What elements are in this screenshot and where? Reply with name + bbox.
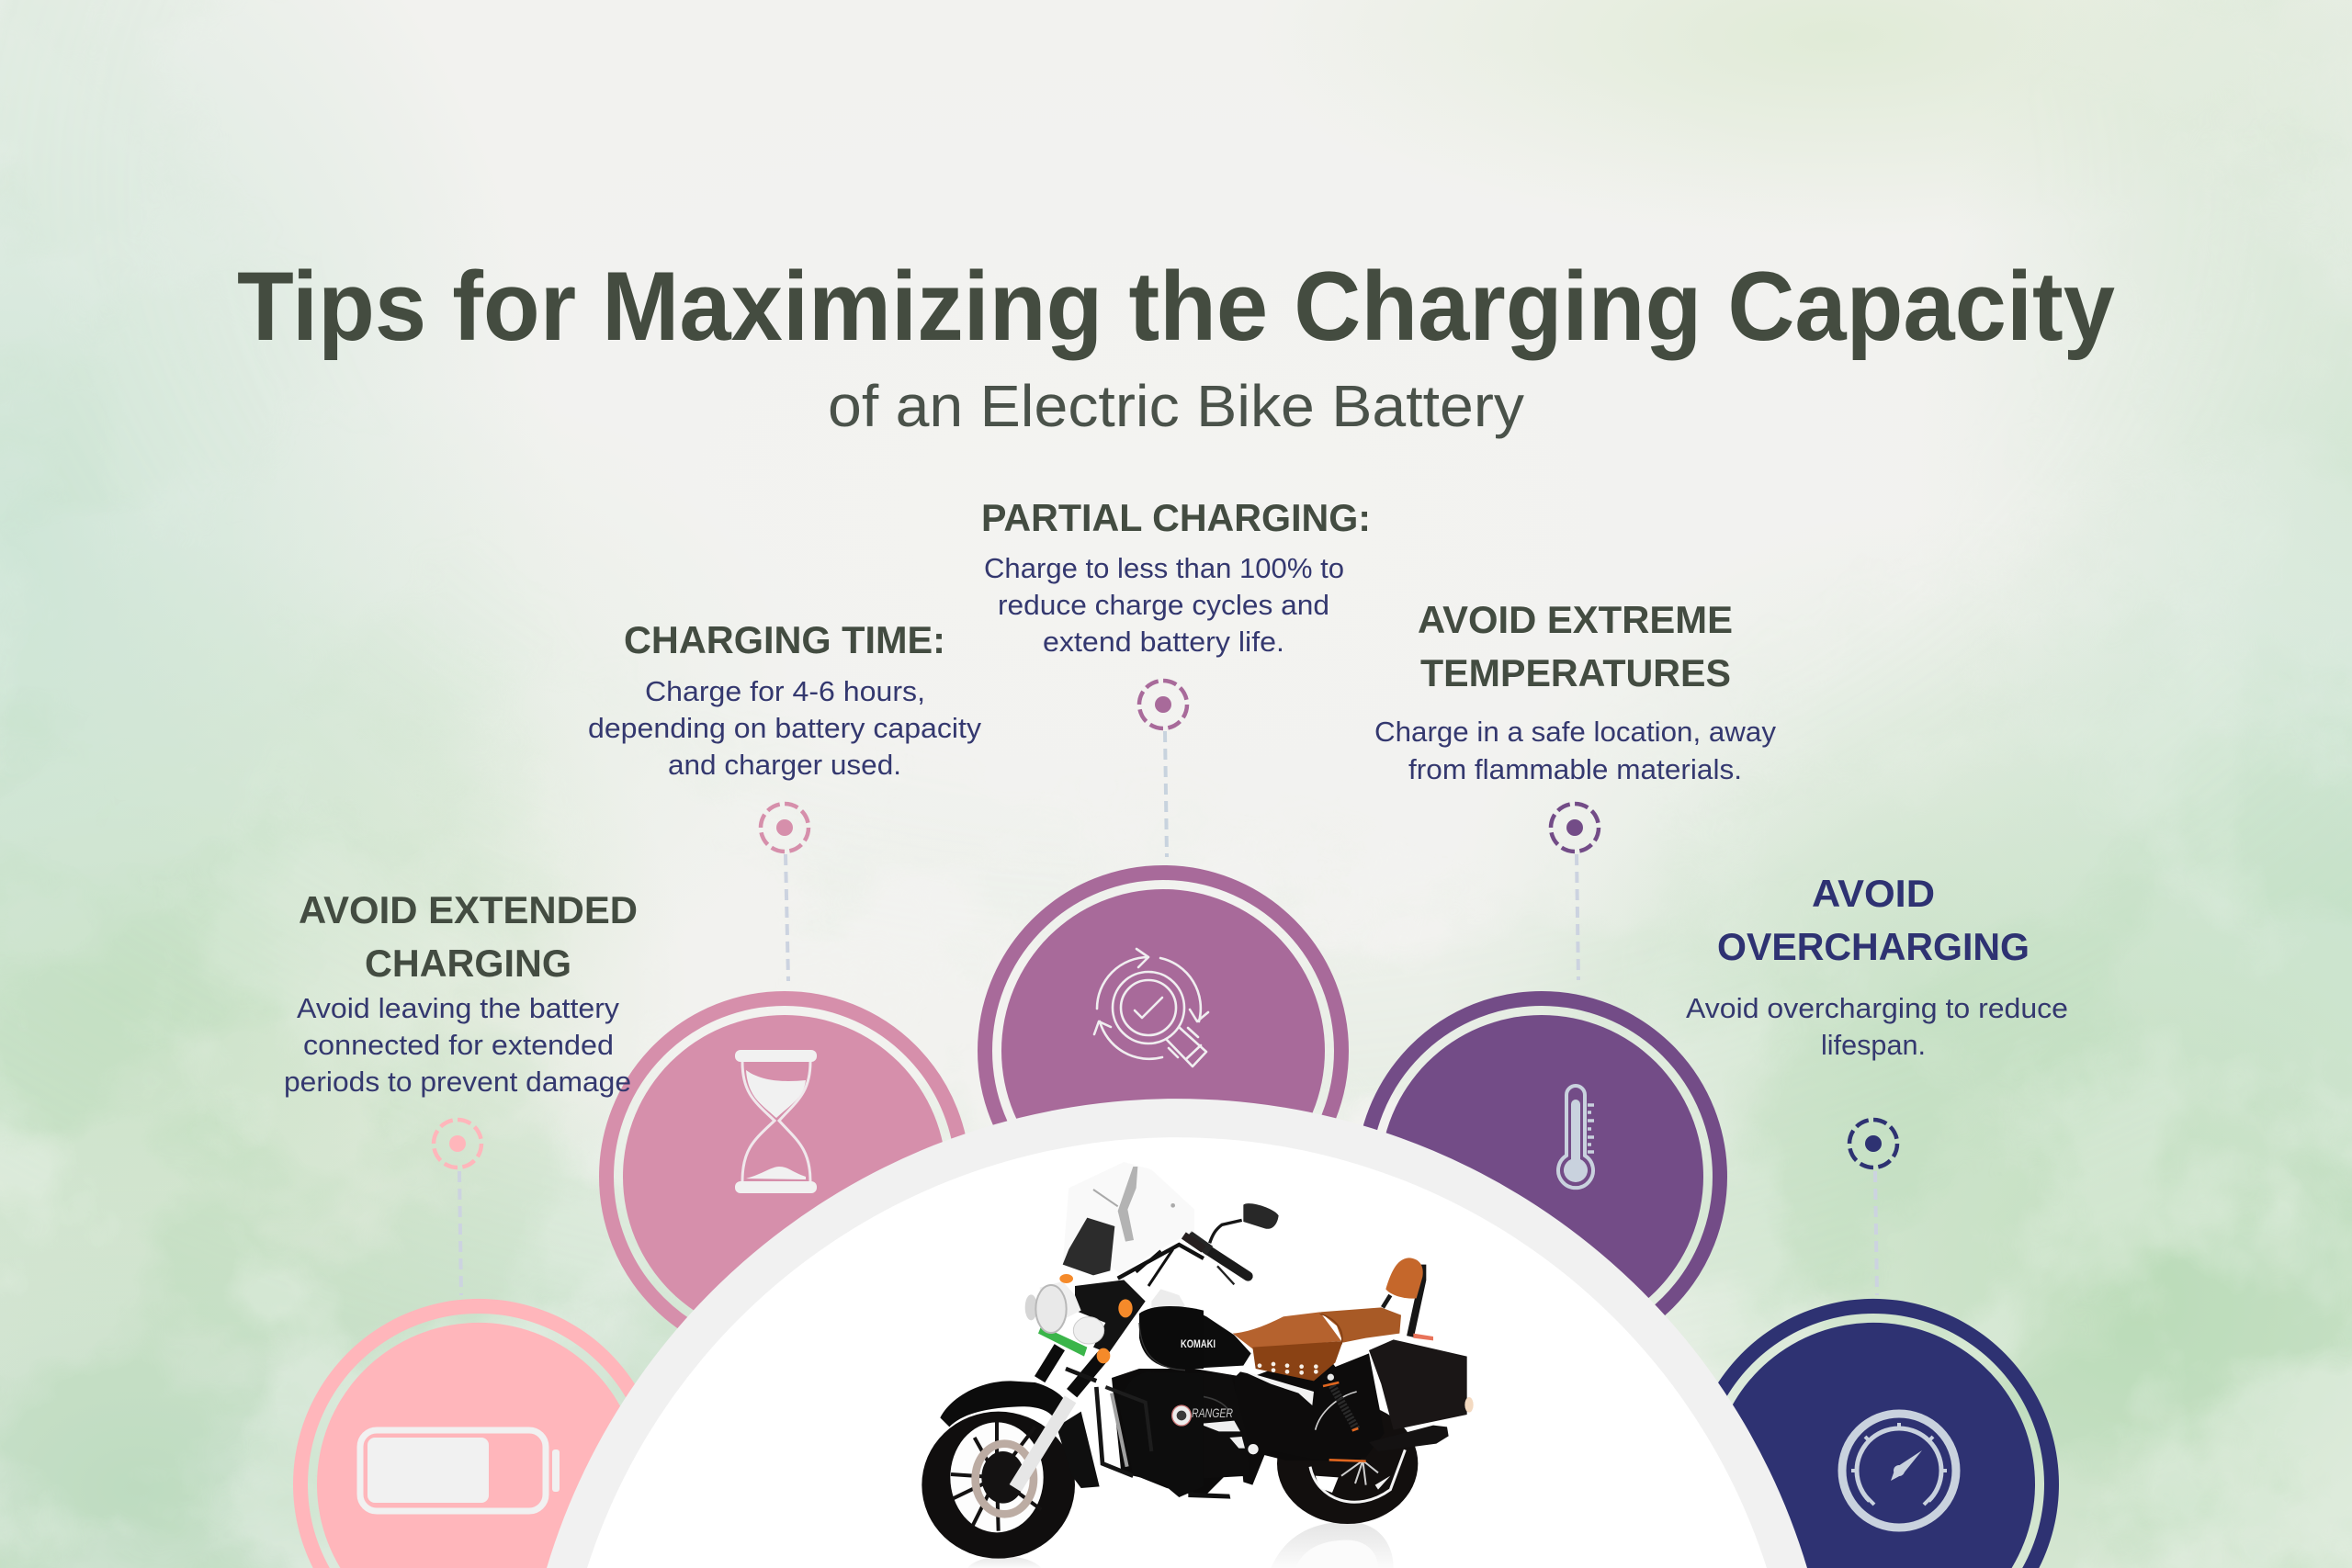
- description: [1374, 716, 1776, 785]
- circle: extended charging (battery): [293, 1299, 664, 1568]
- heading: [1717, 872, 2030, 968]
- icon: speedometer: [1842, 1414, 1956, 1528]
- icon: magnifier with cycle arrows: [1094, 949, 1208, 1066]
- heading: AVOID EXTENDED: [299, 888, 638, 931]
- description: [588, 675, 982, 781]
- connector: overcharging: [1849, 1120, 1897, 1295]
- title: Tips for Maximizing the Charging Capacity: [237, 251, 2115, 361]
- heading: OVERCHARGING: [1717, 925, 2030, 968]
- heading: [299, 888, 638, 985]
- description: extend battery life.: [1043, 626, 1284, 658]
- description: and charger used.: [668, 749, 901, 781]
- heading: TEMPERATURES: [1420, 651, 1731, 694]
- heading: CHARGING TIME:: [624, 618, 945, 661]
- motorcycle illustration: [922, 1162, 1474, 1568]
- description: [1686, 992, 2068, 1061]
- description: connected for extended: [303, 1029, 614, 1061]
- description: reduce charge cycles and: [998, 589, 1329, 621]
- subtitle: of an Electric Bike Battery: [828, 373, 1524, 439]
- heading: PARTIAL CHARGING:: [981, 496, 1371, 539]
- description: depending on battery capacity: [588, 712, 982, 744]
- heading: AVOID: [1812, 872, 1935, 915]
- description: Avoid leaving the battery: [297, 992, 620, 1024]
- gray semicircle base: [547, 1099, 1807, 1568]
- tip: partial charging: [981, 496, 1371, 658]
- circle: overcharging (gauge): [1688, 1299, 2059, 1568]
- heading: AVOID EXTREME: [1418, 598, 1733, 641]
- description: lifespan.: [1821, 1029, 1926, 1061]
- connector: charging time: [761, 804, 808, 981]
- icon: thermometer: [1558, 1086, 1594, 1188]
- connector: partial charging: [1139, 681, 1187, 857]
- description: Charge in a safe location, away: [1374, 716, 1776, 748]
- tip: overcharging: [1686, 872, 2068, 1061]
- description: periods to prevent damage: [284, 1066, 631, 1098]
- circle: charging time (hourglass): [606, 998, 963, 1355]
- circle: partial charging (magnifier): [985, 873, 1341, 1229]
- tip: charging time: [588, 618, 982, 781]
- description: Charge to less than 100% to: [984, 552, 1344, 584]
- description: [284, 992, 631, 1098]
- description: Avoid overcharging to reduce: [1686, 992, 2068, 1024]
- icon: battery: [360, 1430, 560, 1511]
- connector: extended charging: [434, 1120, 481, 1295]
- heading: CHARGING: [365, 942, 571, 985]
- ranger badge: RANGER: [1192, 1405, 1233, 1420]
- description: [984, 552, 1344, 658]
- circle: extreme temperatures (thermometer): [1363, 998, 1720, 1355]
- tip: extreme temperatures: [1374, 598, 1776, 785]
- heading: [1418, 598, 1733, 694]
- white semicircle: [587, 1137, 1767, 1568]
- icon: hourglass: [735, 1050, 817, 1193]
- description: from flammable materials.: [1408, 753, 1742, 785]
- description: Charge for 4-6 hours,: [645, 675, 925, 707]
- tip: extended charging: [284, 888, 638, 1098]
- connector: extreme temperatures: [1551, 804, 1599, 980]
- komaki badge: KOMAKI: [1181, 1337, 1216, 1350]
